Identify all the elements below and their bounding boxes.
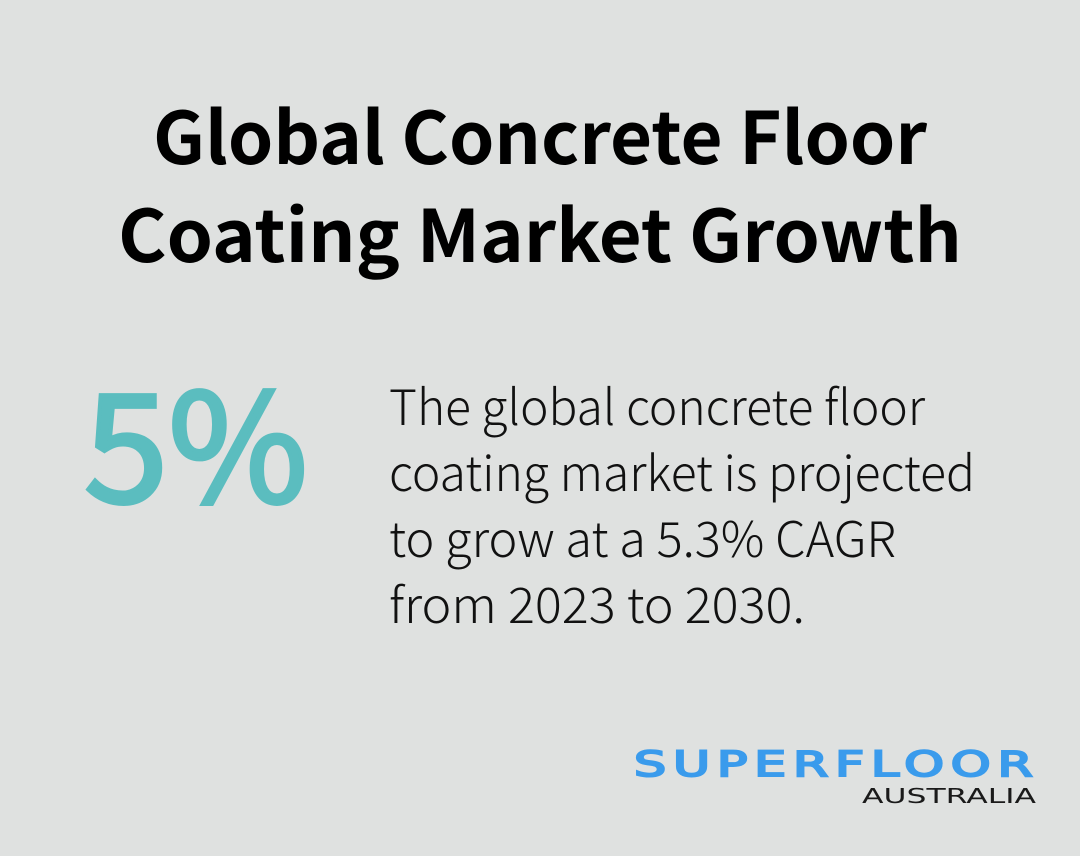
title: Coating Market Growth <box>118 178 962 283</box>
description text: coating market is projected <box>389 435 975 506</box>
description text: to grow at a 5.3% CAGR <box>389 501 896 572</box>
description text <box>389 369 975 638</box>
title <box>118 80 962 283</box>
logo: Superfloor Australia: SUPERFLOOR <box>634 745 1033 785</box>
description text: from 2023 to 2030. <box>389 567 805 638</box>
big stat: 5%: 5% <box>84 329 308 546</box>
title: Global Concrete Floor <box>153 80 928 185</box>
logo: Superfloor Australia: AUSTRALIA <box>862 784 1036 808</box>
logo: Superfloor Australia <box>634 745 1036 808</box>
description text: The global concrete floor <box>389 369 925 440</box>
